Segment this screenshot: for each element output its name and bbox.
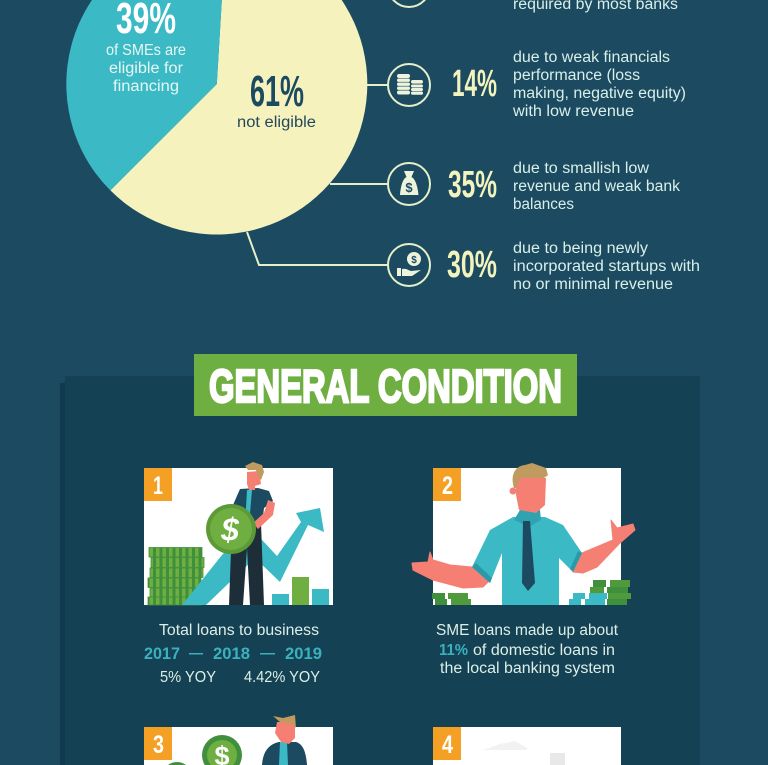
timeline: years: 2019 [285, 645, 322, 663]
caption: total loans to business [144, 622, 322, 686]
row: 35% smallish revenue: revenue and weak bank [513, 178, 680, 195]
pie chart: SME eligibility [66, 0, 367, 235]
timeline: years [144, 645, 322, 663]
caption: SME loans share [436, 622, 619, 677]
figure: man with open arms [412, 463, 635, 605]
card 4 [433, 727, 621, 765]
figure: man holding coin [206, 462, 275, 605]
label: 61% not eligible: not eligible [237, 114, 316, 131]
icon: green coins [162, 735, 242, 765]
icon: money bag: $ [405, 180, 413, 195]
bar chart: small bars [272, 577, 329, 605]
row: required by most banks [388, 0, 678, 13]
badge: 3 [144, 727, 172, 760]
badge: 4 [433, 727, 461, 760]
row: 14% weak financials [388, 49, 686, 120]
row: 30% new startups: due to being newly [513, 240, 648, 257]
icon: cash piles [432, 580, 631, 605]
label: 61% not eligible [237, 67, 316, 131]
row: 35% smallish revenue [388, 160, 680, 213]
row: 14% weak financials: with low revenue [512, 103, 634, 120]
connector lines [247, 85, 388, 265]
caption: total loans to business: 4.42% YOY [244, 669, 320, 686]
label: 39% eligible: eligible for [109, 60, 183, 77]
row: 14% weak financials: performance (loss [513, 67, 640, 84]
caption: SME loans share: the local banking system [440, 660, 615, 677]
caption: SME loans share: SME loans made up about [436, 622, 619, 639]
icon: coin stacks [388, 64, 430, 106]
figure: man holding coin: $ [220, 512, 240, 548]
card 1: total loans illustration [144, 462, 333, 605]
row: 30% new startups: incorporated startups with [513, 258, 700, 275]
badge: 2 [433, 468, 461, 501]
figure: man [262, 715, 307, 765]
caption: total loans to business: Total loans to business [159, 622, 319, 639]
icon: hand holding coin: $ [411, 255, 417, 266]
timeline: years: 2018 [213, 645, 250, 663]
label: 39% eligible: financing [113, 78, 179, 95]
row: 35% smallish revenue: balances [513, 196, 574, 213]
label: 61% not eligible: 61% [250, 67, 304, 116]
row: 14% weak financials: making, negative equity) [513, 85, 686, 102]
caption: SME loans share: 11% [439, 642, 468, 659]
icon: cash stack [148, 548, 204, 605]
badge: 4: 4 [442, 731, 453, 759]
card 2: SME loans illustration [412, 463, 635, 605]
heading: general condition: GENERAL CONDITION [209, 360, 562, 412]
row: 30% new startups [388, 240, 700, 293]
badge: 1: 1 [153, 472, 163, 500]
pie wedge: not eligible 61% [110, 0, 367, 235]
panel: general condition [60, 376, 700, 765]
label: 39% eligible: of SMEs are [106, 42, 186, 59]
pie wedge: eligible 39% [66, 0, 226, 190]
timeline: years: 2017 [144, 645, 180, 663]
row: 30% new startups: no or minimal revenue [513, 276, 673, 293]
icon: rising arrow [182, 508, 324, 605]
label: 39% eligible [106, 0, 186, 95]
caption: total loans to business: 5% YOY [160, 669, 216, 686]
badge: 1 [144, 468, 172, 501]
icon: hand holding coin [388, 244, 430, 286]
caption: SME loans share: of domestic loans in [473, 642, 615, 659]
row: 35% smallish revenue: due to smallish low [513, 160, 650, 177]
row: 14% weak financials: 14% [452, 63, 497, 105]
badge: 3: 3 [153, 731, 164, 759]
icon: money bag [388, 163, 430, 205]
row: 35% smallish revenue: 35% [448, 164, 497, 206]
heading: general condition [194, 354, 577, 416]
card 3 [144, 715, 333, 765]
faint shapes [483, 741, 565, 765]
row: 14% weak financials: due to weak financials [513, 49, 670, 66]
row: 30% new startups: 30% [447, 244, 497, 286]
badge: 2: 2 [442, 472, 453, 500]
